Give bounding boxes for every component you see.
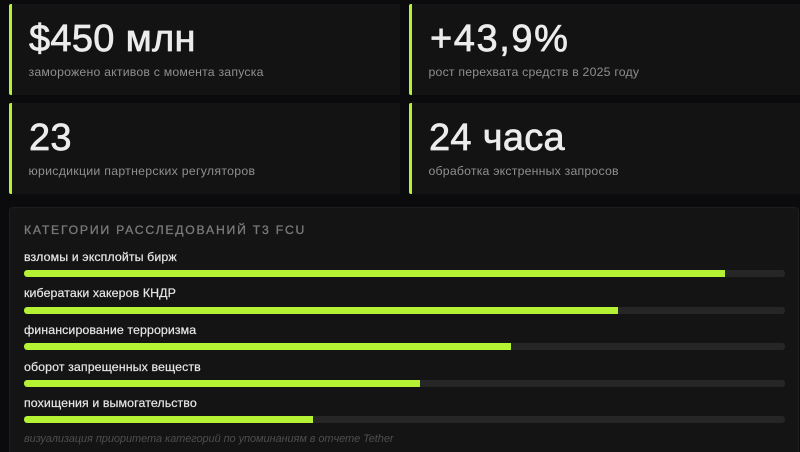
stat caption: frozen assets: заморожено активов с момента запуска: [28, 65, 264, 79]
panel: investigation categories: [9, 207, 799, 452]
bar: kidnapping and extortion: [24, 416, 785, 423]
stat value: 23: 23: [29, 117, 72, 159]
category label: kidnapping and extortion: похищения и вымогательство: [24, 396, 197, 410]
category label: exchange hacks: взломы и эксплойты бирж: [24, 250, 177, 264]
category label: DPRK cyberattacks: кибератаки хакеров КНДР: [24, 286, 176, 300]
stat card: frozen assets: [9, 4, 400, 95]
footnote: визуализация приоритета категорий по упоминаниям в отчете Tether: [24, 433, 393, 445]
stat card: interception growth: [409, 4, 800, 95]
bar: exchange hacks: [24, 270, 785, 277]
stat value: 24 hours: 24 часа: [429, 117, 565, 159]
bar: terrorism financing: [24, 343, 785, 350]
stat value: +43.9%: +43,9%: [430, 18, 570, 60]
stat card: emergency request handling: [409, 103, 800, 194]
category label: illicit drugs: оборот запрещенных веществ: [24, 360, 201, 374]
stat caption: interception growth: рост перехвата средств в 2025 году: [428, 65, 639, 79]
bar: DPRK cyberattacks: [24, 307, 785, 314]
category label: terrorism financing: финансирование терроризма: [24, 323, 196, 337]
panel heading: КАТЕГОРИИ РАССЛЕДОВАНИЙ T3 FCU: [24, 223, 306, 237]
stat card: jurisdictions: [9, 103, 400, 194]
stat caption: emergency requests: обработка экстренных запросов: [428, 164, 619, 178]
bar: illicit drugs: [24, 380, 785, 387]
stat value: $450 million: $450 млн: [29, 18, 196, 60]
stat caption: jurisdictions: юрисдикции партнерских регуляторов: [28, 164, 255, 178]
